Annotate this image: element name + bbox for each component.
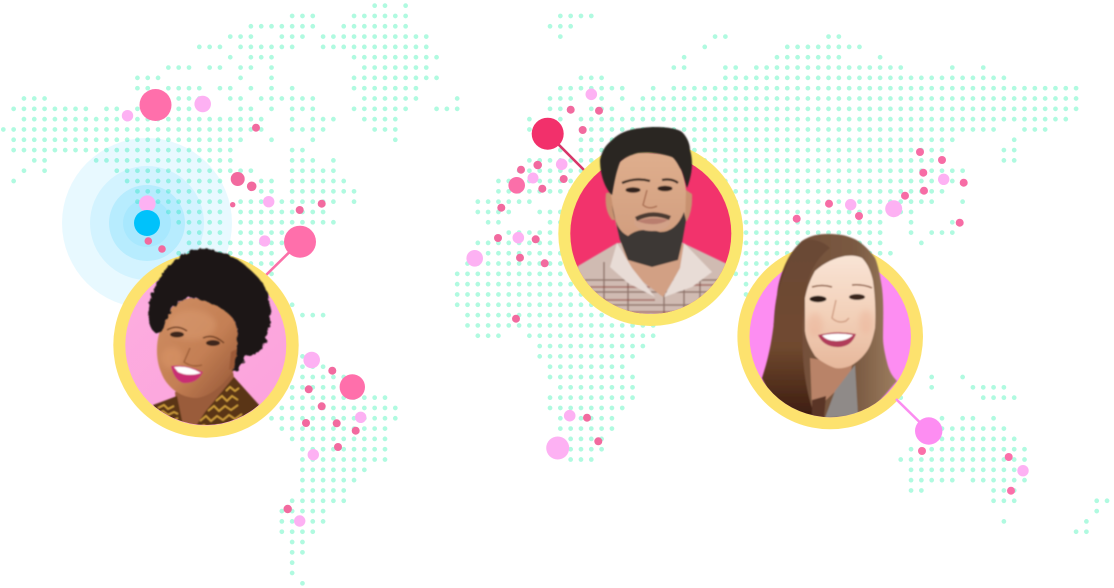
connector line: third portrait xyxy=(896,399,929,431)
figure xyxy=(762,234,897,420)
pin marker: third portrait xyxy=(915,417,942,445)
markers: south america xyxy=(284,352,366,527)
figure xyxy=(578,152,726,314)
man's hair xyxy=(600,127,692,195)
figure xyxy=(148,298,260,432)
markers: north america xyxy=(122,89,326,253)
portrait: woman with long hair xyxy=(737,234,923,429)
portrait ring xyxy=(737,244,923,429)
connector line: second portrait xyxy=(548,134,586,172)
blue location marker xyxy=(134,210,160,236)
markers: asia xyxy=(793,148,968,227)
afro hair xyxy=(148,249,270,372)
markers: europe and africa xyxy=(466,88,603,460)
connector line: first portrait xyxy=(262,242,300,279)
markers: oceania xyxy=(918,447,1029,495)
portrait background xyxy=(750,256,911,417)
portrait background xyxy=(570,153,731,314)
portrait: bearded man xyxy=(558,127,745,330)
pin marker: first portrait xyxy=(284,226,316,258)
blue pulse location rings xyxy=(62,138,232,308)
portrait ring xyxy=(558,141,743,326)
portrait background xyxy=(125,264,286,426)
pin marker: second portrait xyxy=(532,118,564,150)
portrait: woman with afro xyxy=(113,249,299,438)
portrait ring xyxy=(113,252,299,438)
